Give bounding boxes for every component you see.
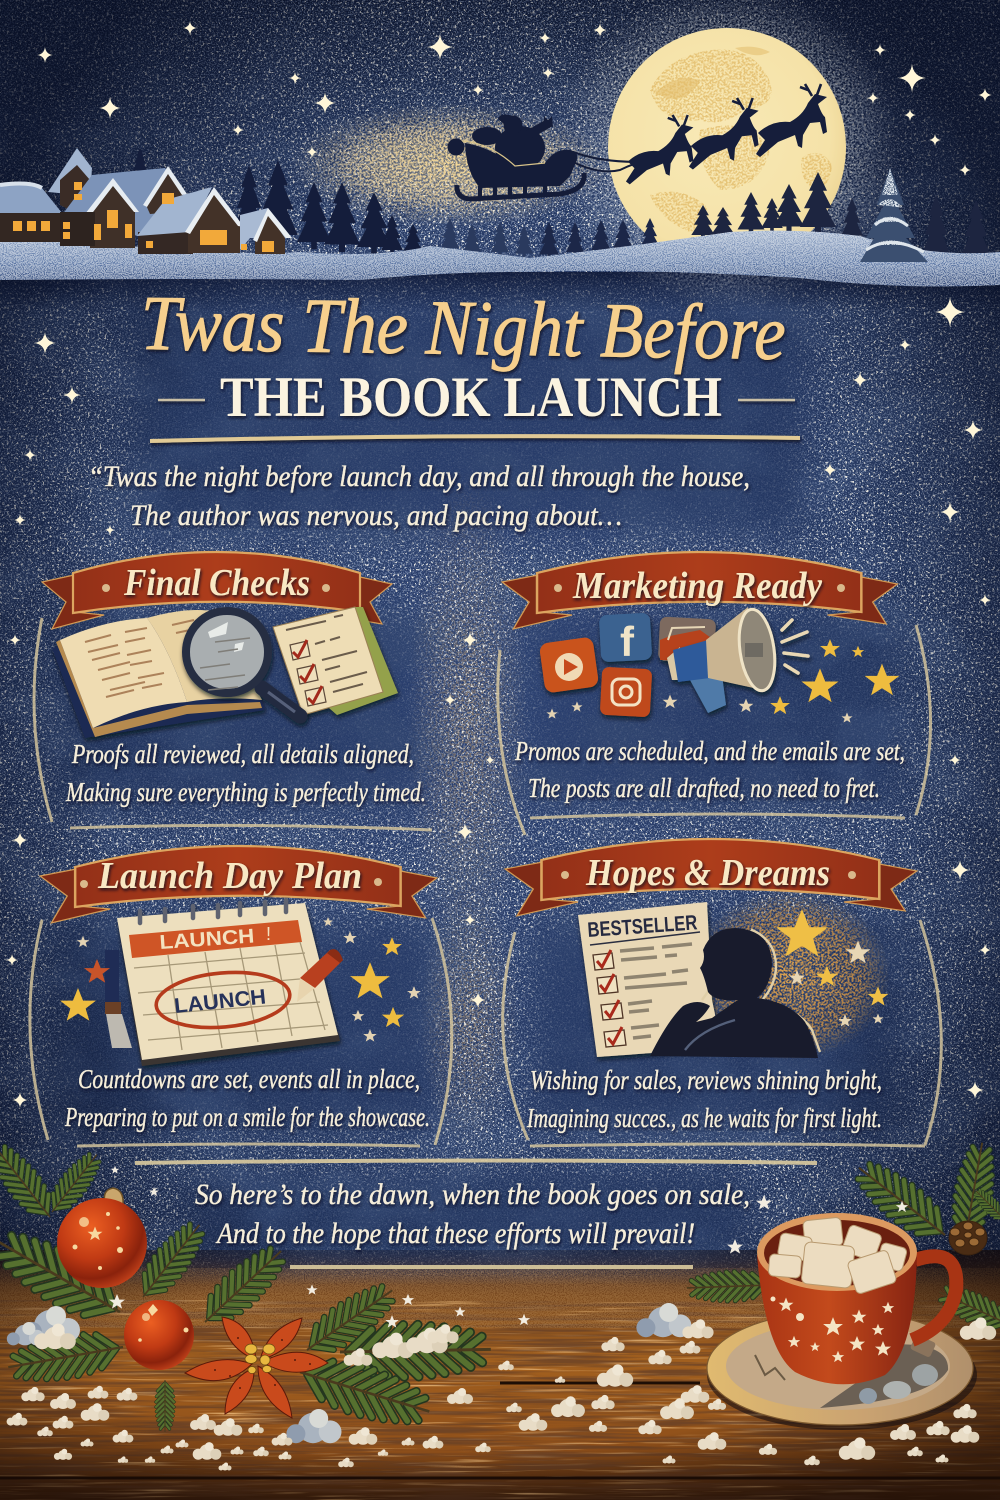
Santa's sleigh silhouette — [448, 115, 640, 199]
icon: red tile — [658, 617, 716, 663]
ornament: large red bauble — [57, 1188, 147, 1288]
mug of hot cocoa — [757, 1213, 956, 1384]
verse: launch day plan: Countdowns are set, events all in place, — [78, 1064, 420, 1094]
icon: facebook tile — [599, 613, 652, 665]
reindeer team — [626, 84, 827, 184]
wooden table — [0, 1250, 1000, 1500]
bright stars — [6, 21, 992, 1108]
glow behind silhouette — [690, 890, 890, 1060]
icon: wall calendar — [117, 900, 340, 1066]
banner: final checks — [42, 552, 392, 629]
verse: final checks: Proofs all reviewed, all details aligned, — [71, 739, 414, 769]
title: Twas The Night Before — [140, 279, 786, 376]
icon: open book — [52, 610, 265, 738]
intro verse: The author was nervous, and pacing about… — [130, 499, 622, 532]
closing verse: So here’s to the dawn, when the book goes on sale, — [195, 1178, 750, 1211]
pine branches left — [0, 1138, 491, 1434]
banner: final checks: Final Checks — [123, 562, 310, 604]
snowy hills — [0, 230, 1000, 286]
moonlit haze — [290, 0, 899, 307]
poinsettia — [185, 1317, 328, 1418]
pine branches right — [686, 1140, 1000, 1337]
banner: launch day plan — [40, 846, 437, 923]
title: THE BOOK LAUNCH — [220, 366, 722, 429]
banner: hopes and dreams: Hopes & Dreams — [585, 852, 830, 894]
intro verse: “Twas the night before launch day, and all through the house, — [88, 460, 750, 493]
icon: bestseller list — [578, 902, 722, 1057]
pinecone — [949, 1221, 987, 1255]
snow scattered on the table — [7, 1303, 996, 1470]
closing verse — [195, 1178, 750, 1250]
panel: hopes and dreams — [503, 839, 941, 1146]
intro verse — [88, 460, 750, 532]
banner: launch day plan: Launch Day Plan — [97, 855, 362, 897]
icon: wall calendar: LAUNCH — [173, 985, 267, 1018]
verse: hopes and dreams: Wishing for sales, reviews shining bright, — [530, 1065, 882, 1095]
icon: green book and checklist — [273, 607, 398, 715]
icon: bestseller list: BESTSELLER — [587, 911, 698, 942]
closing divider — [135, 1160, 817, 1267]
title — [140, 279, 800, 441]
pine tree line — [133, 148, 990, 262]
verse: final checks: Making sure everything is perfectly timed. — [65, 777, 426, 807]
verse: marketing ready: The posts are all drafted, no need to fret. — [528, 773, 880, 803]
icon: brush — [105, 950, 132, 1048]
icon: gold stars — [60, 917, 421, 1042]
icon: megaphone — [667, 607, 808, 713]
icon: facebook tile: f — [620, 618, 635, 665]
saucer — [707, 1311, 977, 1430]
verse: marketing ready — [514, 736, 905, 803]
icon: video tile — [539, 636, 599, 694]
icon: wall calendar: ! — [266, 924, 271, 944]
icon: gold stars — [776, 909, 889, 1027]
village houses — [0, 148, 292, 254]
verse: marketing ready: Promos are scheduled, and the emails are set, — [514, 736, 905, 766]
icon: wall calendar: LAUNCH — [159, 925, 255, 954]
small white stars near the greenery — [109, 1166, 908, 1328]
panel: marketing ready — [498, 552, 930, 835]
icon: instagram tile — [600, 667, 652, 717]
closing verse: And to the hope that these efforts will prevail! — [215, 1217, 695, 1250]
icon: magnifying glass — [186, 611, 300, 716]
verse: final checks — [65, 739, 426, 807]
verse: hopes and dreams: Imagining succes., as he waits for first light. — [526, 1103, 882, 1133]
verse: hopes and dreams — [526, 1065, 882, 1133]
verse: launch day plan: Preparing to put on a smile for the showcase. — [64, 1102, 430, 1132]
verse: launch day plan — [64, 1064, 430, 1132]
panel: launch day plan — [30, 846, 452, 1146]
icon: gold stars — [546, 639, 899, 723]
icon: silhouette of author — [650, 928, 820, 1058]
icon: pencil — [297, 949, 343, 1002]
banner: marketing ready: Marketing Ready — [572, 565, 822, 607]
banner: marketing ready — [502, 552, 898, 629]
panel: final checks — [34, 552, 432, 830]
moon — [608, 28, 846, 266]
banner: hopes and dreams — [505, 839, 917, 916]
ornament: small red bauble — [124, 1300, 194, 1370]
snowy fir on the right — [860, 168, 928, 262]
